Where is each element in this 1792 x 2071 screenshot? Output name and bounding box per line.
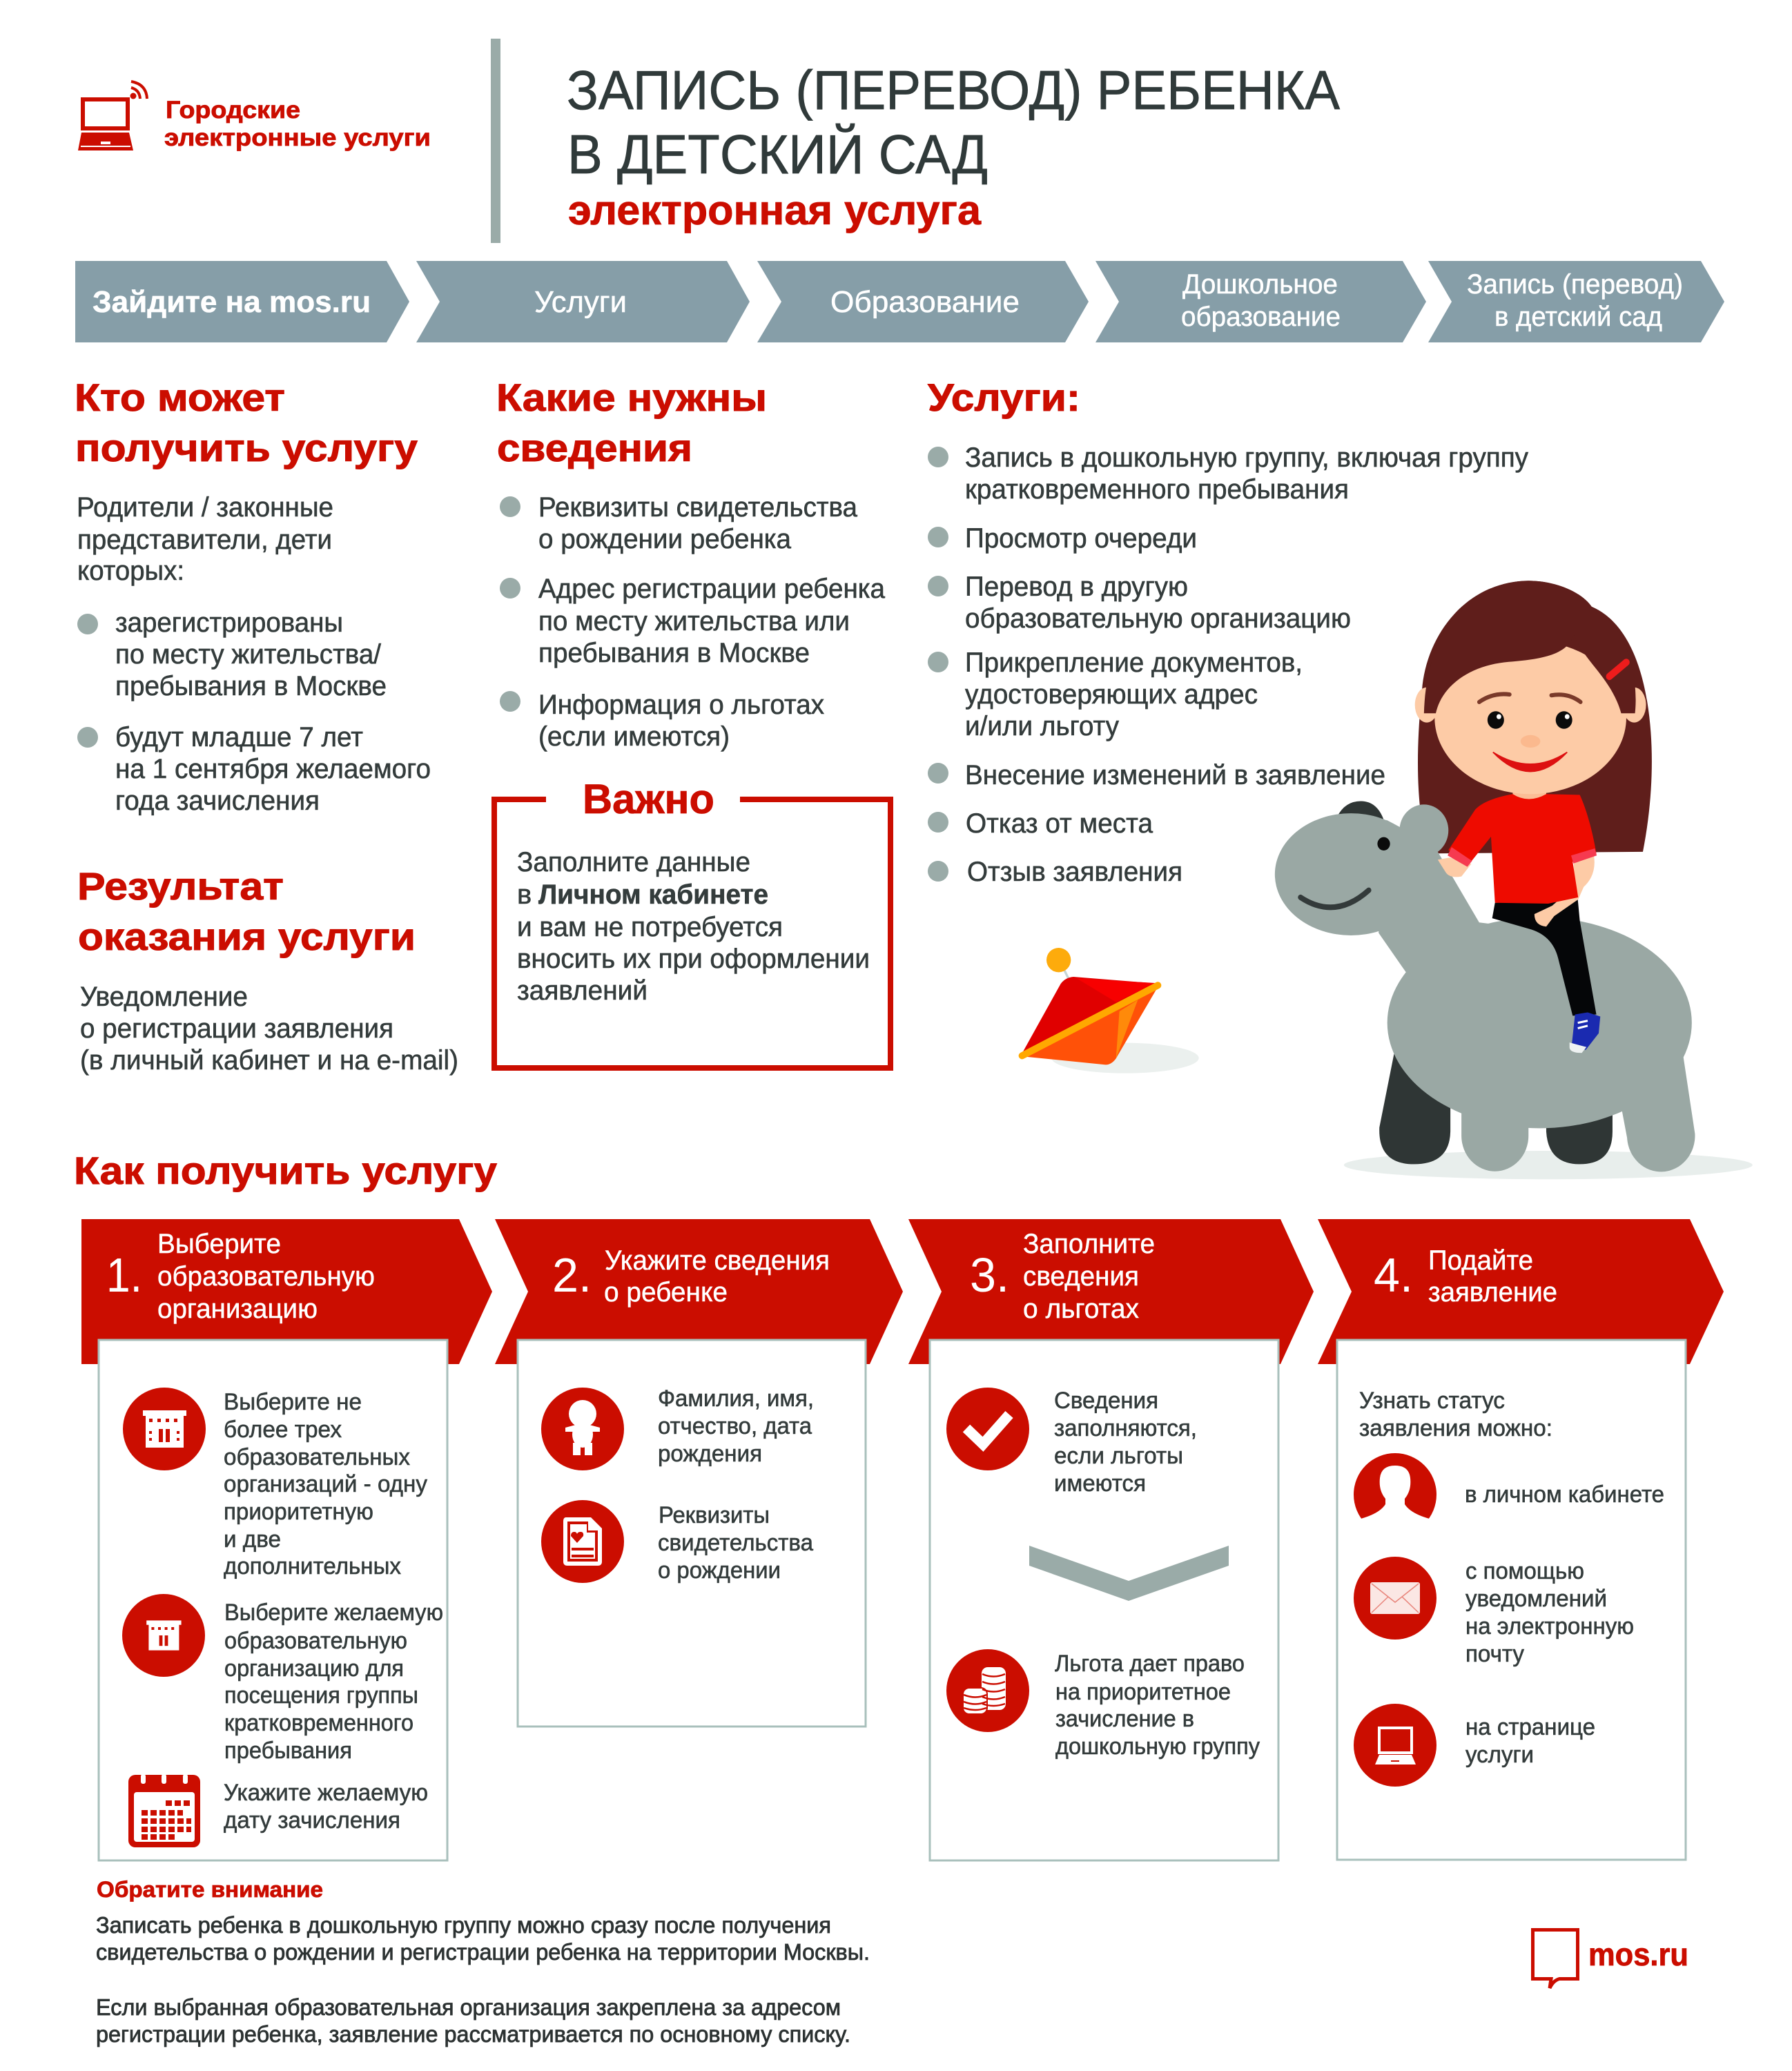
barrette <box>1609 662 1626 677</box>
heading: оказания услуги <box>78 915 416 958</box>
chevron: Зайдите на mos.ru <box>75 261 409 342</box>
note text: регистрации ребенка, заявление рассматривается по основному списку. <box>96 2021 850 2047</box>
service 3: Перевод в другую <box>965 572 1188 602</box>
panel <box>518 1340 866 1727</box>
arrow <box>81 1219 492 1364</box>
step title: 2. <box>552 1248 592 1302</box>
service 3 <box>928 572 1351 634</box>
note: обратите внимание <box>96 1877 870 2047</box>
icon: check mark <box>946 1388 1029 1470</box>
navigation chevrons <box>75 261 1724 342</box>
title: электронная услуга <box>568 187 982 233</box>
icon: laptop <box>1354 1704 1436 1787</box>
service 1 <box>928 443 1528 505</box>
step title <box>106 1229 375 1324</box>
illustration: spinning top <box>1020 948 1199 1073</box>
callout: важно <box>494 776 890 1068</box>
chevron: Образование <box>757 261 1089 342</box>
service 4: и/или льготу <box>965 711 1119 741</box>
title: В ДЕТСКИЙ САД <box>567 123 988 185</box>
icon: building <box>123 1388 206 1470</box>
step title: о льготах <box>1023 1294 1139 1324</box>
step title: Подайте <box>1428 1245 1533 1276</box>
bullet 1: Реквизиты свидетельства <box>538 492 858 523</box>
bullet 3: Информация о льготах <box>538 690 824 720</box>
text: on service page: услуги <box>1465 1742 1534 1768</box>
intro text <box>77 492 333 586</box>
text: short stay group: образовательную <box>224 1628 407 1654</box>
heading: Кто может <box>75 376 285 419</box>
text: choose up to three: и две <box>224 1526 281 1553</box>
service 1: Запись в дошкольную группу, включая группу <box>965 443 1528 473</box>
text: choose up to three: образовательных <box>224 1444 410 1470</box>
result text: Уведомление <box>80 982 248 1012</box>
text: name and birth date: рождения <box>658 1441 762 1467</box>
text: on service page <box>1465 1714 1595 1768</box>
panel <box>99 1340 447 1860</box>
chevron: Дошкольное образование: Дошкольное <box>1182 269 1338 300</box>
heading: как получить услугу: Как получить услугу <box>74 1149 497 1192</box>
callout text: в <box>517 879 532 910</box>
eyes <box>1488 711 1572 729</box>
text: by email: почту <box>1465 1641 1524 1667</box>
text: benefits are filled in: если льготы <box>1054 1443 1183 1469</box>
bullet 3: (если имеются) <box>538 721 730 752</box>
step title: Укажите сведения <box>605 1245 830 1276</box>
text: desired date: дату зачисления <box>224 1807 400 1834</box>
logo text <box>164 97 431 151</box>
callout text <box>517 847 870 1006</box>
callout text: заявлений <box>517 975 647 1006</box>
arrow: grey chevron down <box>1029 1546 1229 1601</box>
neck <box>1512 780 1546 801</box>
icon: envelope <box>1354 1557 1436 1640</box>
text: desired date <box>224 1780 428 1834</box>
ears <box>1415 688 1646 723</box>
text: priority right: дошкольную группу <box>1055 1733 1260 1760</box>
step title: образовательную <box>157 1261 375 1292</box>
icon: speech bubble <box>1532 1930 1578 1988</box>
note text: Если выбранная образовательная организация закреплена за адресом <box>96 1994 841 2020</box>
title <box>567 59 1341 233</box>
step title: заявление <box>1428 1277 1557 1307</box>
face <box>1434 641 1626 794</box>
chevron: Услуги <box>416 261 750 342</box>
arrow <box>495 1219 903 1364</box>
logo text: mos.ru <box>1588 1936 1688 1972</box>
arrow <box>908 1219 1314 1364</box>
bullet 2: на 1 сентября желаемого <box>115 754 431 784</box>
step title <box>970 1229 1155 1324</box>
step 1 <box>81 1219 492 1860</box>
bullet 2 <box>77 722 431 816</box>
bullet 2 <box>500 574 886 668</box>
bullet 1: зарегистрированы <box>115 607 343 638</box>
trousers <box>1492 900 1597 1015</box>
service 5: Внесение изменений в заявление <box>965 760 1385 790</box>
text: birth certificate details: о рождении <box>658 1557 781 1584</box>
chevron: Дошкольное образование: образование <box>1181 302 1341 332</box>
callout text: Личном кабинете <box>538 879 768 910</box>
logo: mos.ru <box>1532 1930 1688 1988</box>
chevron: Запись (перевод) в детский сад: в детский сад <box>1494 302 1662 332</box>
text: short stay group: организацию для <box>224 1655 404 1682</box>
text: by email: с помощью <box>1465 1558 1584 1584</box>
step title: организацию <box>157 1294 318 1324</box>
step title: Заполните <box>1023 1229 1155 1259</box>
panel: услуги <box>928 376 1528 887</box>
text: choose up to three: более трех <box>224 1417 342 1443</box>
step title: 4. <box>1374 1248 1413 1302</box>
text: benefits are filled in <box>1054 1388 1197 1497</box>
heading: Какие нужны <box>496 376 767 419</box>
sleeve cuffs <box>1448 847 1597 867</box>
heading <box>77 864 416 958</box>
step title: Выберите <box>157 1229 281 1259</box>
text: name and birth date: отчество, дата <box>658 1413 812 1439</box>
left arm <box>1438 857 1471 877</box>
text: choose up to three: Выберите не <box>224 1389 362 1415</box>
hippo eye <box>1377 837 1390 850</box>
heading: Результат <box>77 864 284 908</box>
text: choose up to three <box>224 1389 427 1579</box>
panel <box>1337 1340 1686 1860</box>
bullet 2: по месту жительства или <box>538 606 850 636</box>
arrow <box>1318 1219 1724 1364</box>
chevron: Дошкольное образование <box>1095 261 1426 342</box>
bullet 1 <box>77 607 387 701</box>
text: priority right: на приоритетное <box>1055 1679 1231 1705</box>
bullet 3 <box>500 690 824 752</box>
service 4: Прикрепление документов, <box>965 648 1303 678</box>
logo: городские электронные услуги <box>78 81 431 151</box>
smile <box>1493 752 1567 771</box>
text: short stay group <box>224 1600 443 1764</box>
result text: о регистрации заявления <box>80 1013 393 1044</box>
icon: person <box>1352 1453 1438 1537</box>
text: birth certificate details: свидетельства <box>658 1530 813 1556</box>
icon: calendar <box>128 1774 200 1847</box>
step title: 3. <box>970 1248 1009 1302</box>
heading <box>75 376 418 469</box>
icon: document <box>541 1500 624 1583</box>
bullet 1: о рождении ребенка <box>538 524 792 554</box>
text: priority right: зачисление в <box>1055 1706 1194 1732</box>
icon: small building <box>122 1594 205 1677</box>
result text: (в личный кабинет и на e-mail) <box>80 1045 458 1076</box>
chevron: Зайдите на mos.ru: Зайдите на mos.ru <box>92 285 371 319</box>
text: on service page: на странице <box>1465 1714 1595 1740</box>
text: by email: уведомлений <box>1465 1586 1607 1612</box>
divider <box>491 39 500 243</box>
title: ЗАПИСЬ (ПЕРЕВОД) РЕБЕНКА <box>567 59 1341 121</box>
text: choose up to three: приоритетную <box>224 1499 373 1525</box>
text: benefits are filled in: Сведения <box>1054 1388 1158 1414</box>
service 3: образовательную организацию <box>965 603 1351 634</box>
heading: сведения <box>497 426 692 469</box>
bullet 2: будут младше 7 лет <box>115 722 363 752</box>
text: short stay group: Выберите желаемую <box>224 1600 443 1626</box>
panel: какие нужны сведения <box>496 376 886 752</box>
callout heading: Важно <box>583 776 714 822</box>
bullet 2: Адрес регистрации ребенка <box>538 574 886 604</box>
note text <box>96 1912 870 2047</box>
bullet 2: года зачисления <box>115 786 320 816</box>
callout text: Заполните данные <box>517 847 750 877</box>
bullet 1 <box>500 492 858 554</box>
bullet 2: пребывания в Москве <box>538 638 810 668</box>
text: benefits are filled in: заполняются, <box>1054 1415 1197 1441</box>
heading <box>496 376 767 469</box>
note text: свидетельства о рождении и регистрации ребенка на территории Москвы. <box>96 1939 870 1965</box>
service 4: удостоверяющих адрес <box>965 679 1258 710</box>
step title <box>552 1245 830 1307</box>
step title: сведения <box>1023 1261 1139 1292</box>
step 3 <box>908 1219 1314 1860</box>
hair back <box>1418 581 1652 853</box>
step title <box>1374 1245 1557 1307</box>
panel <box>930 1340 1278 1860</box>
logo text: электронные услуги <box>164 124 431 151</box>
text: status intro: Узнать статус <box>1359 1388 1505 1414</box>
intro text: представители, дети <box>77 525 332 555</box>
text: desired date: Укажите желаемую <box>224 1780 428 1806</box>
text: priority right: Льгота дает право <box>1055 1651 1245 1677</box>
text: in personal account: в личном кабинете <box>1465 1481 1664 1508</box>
callout text: вносить их при оформлении <box>517 944 870 974</box>
text: benefits are filled in: имеются <box>1054 1470 1146 1497</box>
girl <box>1415 581 1646 1053</box>
ground shadow <box>1344 1151 1753 1179</box>
text: short stay group: кратковременного <box>224 1710 413 1736</box>
text: priority right <box>1055 1651 1260 1760</box>
text: name and birth date <box>658 1385 814 1467</box>
service 1: кратковременного пребывания <box>965 474 1349 505</box>
chevron: Образование: Образование <box>830 285 1020 319</box>
text: birth certificate details <box>658 1502 813 1584</box>
icon: baby <box>541 1388 624 1470</box>
shoe <box>1572 1012 1600 1050</box>
text: by email: на электронную <box>1465 1613 1634 1640</box>
service 2: Просмотр очереди <box>965 523 1197 554</box>
heading: получить услугу <box>75 426 418 469</box>
nose <box>1521 735 1540 748</box>
text: choose up to three: дополнительных <box>224 1553 401 1579</box>
intro text: которых: <box>77 556 184 586</box>
panel: результат оказания услуги <box>77 864 458 1076</box>
step title: 1. <box>106 1248 142 1302</box>
result text <box>80 982 458 1076</box>
chevron: Запись (перевод) в детский сад: Запись (перевод) <box>1467 269 1683 300</box>
callout text: и вам не потребуется <box>517 912 783 942</box>
text: short stay group: посещения группы <box>224 1682 418 1709</box>
text: birth certificate details: Реквизиты <box>659 1502 770 1528</box>
service 4 <box>928 648 1303 741</box>
bullet 1: по месту жительства/ <box>115 639 382 670</box>
intro text: Родители / законные <box>77 492 333 523</box>
heading: Услуги: <box>928 376 1080 419</box>
text: choose up to three: организаций - одну <box>224 1471 427 1497</box>
bullet 1: пребывания в Москве <box>115 671 387 701</box>
logo text: Городские <box>166 97 300 124</box>
icon: coins <box>946 1649 1029 1732</box>
panel: кто может получить услугу <box>75 376 431 816</box>
text: name and birth date: Фамилия, имя, <box>658 1385 814 1412</box>
text: by email <box>1465 1558 1634 1667</box>
text: short stay group: пребывания <box>224 1738 352 1764</box>
illustration: girl riding a hippo toy <box>1275 581 1753 1179</box>
back legs <box>1337 801 1613 1164</box>
service 7: Отзыв заявления <box>967 857 1182 887</box>
text: status intro <box>1359 1388 1552 1441</box>
hair fringe <box>1424 581 1636 713</box>
hippo body <box>1275 804 1695 1171</box>
note heading: Обратите внимание <box>97 1877 323 1902</box>
chevron: Запись (перевод) в детский сад <box>1428 261 1724 342</box>
service 6: Отказ от места <box>966 808 1153 839</box>
right arm and hand <box>1535 853 1595 926</box>
hippo mouth <box>1301 891 1369 907</box>
step 4 <box>1318 1219 1724 1860</box>
step title: о ребенке <box>604 1277 728 1307</box>
shirt <box>1448 794 1597 904</box>
eyebrows <box>1479 694 1581 702</box>
step 2 <box>495 1219 903 1727</box>
chevron: Услуги: Услуги <box>534 285 627 319</box>
text: status intro: заявления можно: <box>1359 1415 1552 1441</box>
icon: laptop with wifi <box>78 81 147 150</box>
note text: Записать ребенка в дошкольную группу можно сразу после получения <box>96 1912 831 1938</box>
